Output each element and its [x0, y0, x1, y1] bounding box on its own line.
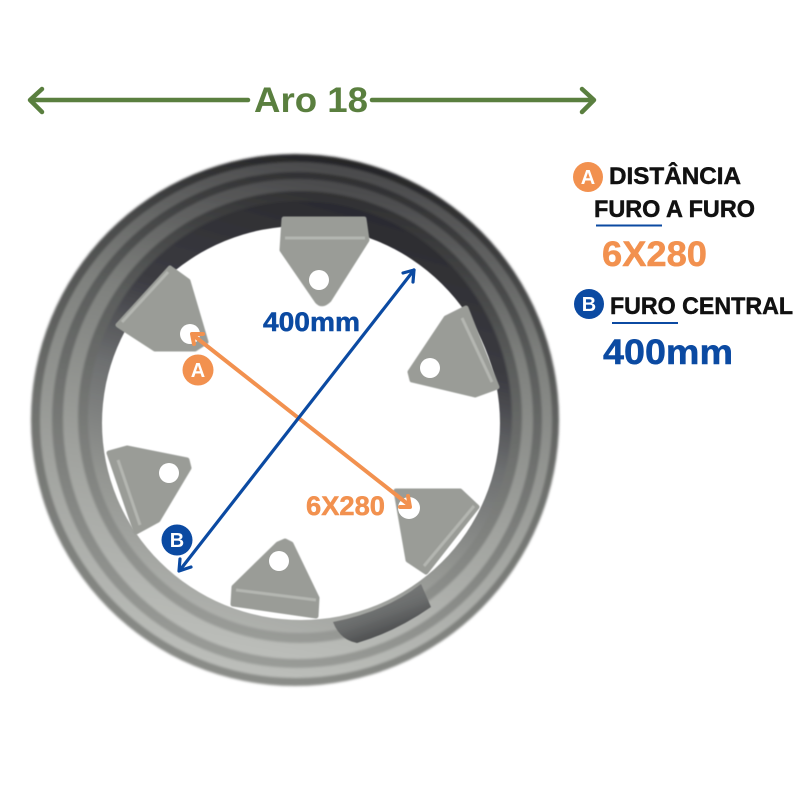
badge A on wheel	[182, 354, 214, 386]
tab: upper right	[410, 308, 497, 395]
legend heading A line 1: DISTÂNCIA	[609, 162, 741, 190]
dimension arrow: Aro 18 width	[30, 89, 594, 112]
center opening	[102, 226, 500, 620]
arrow: blue central bore diameter	[179, 270, 414, 571]
legend value A: 6X280	[602, 235, 707, 274]
badge A	[573, 162, 603, 192]
label: 6X280 on wheel: 6X280	[306, 491, 385, 521]
heading: Aro 18: Aro 18	[254, 81, 368, 120]
badge A: A	[581, 167, 595, 189]
tab bend highlights	[118, 238, 492, 600]
arrow: orange bolt-to-bolt distance	[192, 334, 410, 507]
tab: top	[282, 219, 367, 304]
legend heading B: FURO CENTRAL	[610, 293, 793, 320]
tab: bottom	[233, 541, 317, 616]
tab bolt holes	[159, 270, 440, 571]
tab: left	[109, 448, 189, 532]
badge B: B	[582, 294, 596, 316]
legend B: central bore	[574, 289, 793, 372]
legend A: distance between holes	[573, 162, 755, 274]
label: 400mm on wheel: 400mm	[263, 307, 360, 337]
badge B on wheel	[162, 524, 192, 556]
tab: lower right	[396, 491, 477, 572]
badge B on wheel: B	[170, 530, 184, 552]
wheel rim photo illustration	[31, 154, 559, 686]
legend heading A line 2: FURO A FURO	[594, 196, 755, 223]
badge A on wheel: A	[191, 360, 205, 382]
legend value B: 400mm	[603, 333, 733, 372]
mounting tabs	[109, 219, 497, 616]
rim notch	[333, 584, 431, 643]
tab: upper left	[118, 268, 206, 349]
rim body	[31, 154, 559, 686]
badge B	[574, 289, 604, 319]
